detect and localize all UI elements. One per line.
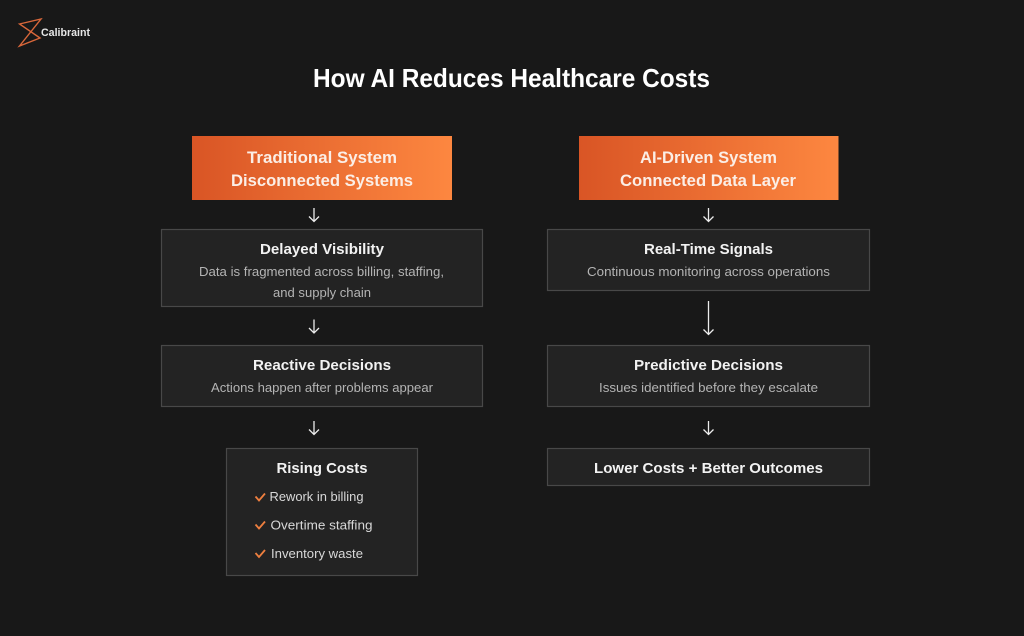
- card: Lower Costs + Better Outcomes: [548, 448, 870, 486]
- arrow: [704, 208, 714, 222]
- card: Real-Time Signals: Continuous monitoring across operations: [587, 265, 830, 279]
- arrow: [309, 421, 319, 434]
- panel: AI-driven system column: [548, 136, 870, 486]
- arrow: [704, 421, 714, 434]
- card: Reactive Decisions: Reactive Decisions: [253, 357, 391, 374]
- panel: traditional system column: [162, 136, 482, 576]
- card: Real-Time Signals: Real-Time Signals: [644, 241, 773, 258]
- header: Traditional System: Traditional System: [247, 149, 397, 167]
- card: Predictive Decisions: Predictive Decisions: [634, 357, 783, 374]
- logo: Calibraint: Calibraint: [41, 27, 90, 39]
- arrow: [309, 320, 319, 333]
- card: Delayed Visibility: Data is fragmented across billing, staffing,: [199, 265, 444, 279]
- card: Predictive Decisions: Issues identified before they escalate: [599, 381, 818, 395]
- card: Delayed Visibility: Delayed Visibility: [260, 241, 385, 258]
- logo: Calibraint: [20, 19, 90, 46]
- arrow: long: [704, 301, 714, 334]
- list item: Overtime staffing: Overtime staffing: [270, 518, 373, 532]
- list item: Rework in billing: Rework in billing: [270, 490, 364, 504]
- header: AI-Driven System: [579, 136, 838, 200]
- card: Rising Costs: Rising Costs: [276, 460, 368, 477]
- header: Traditional System: [192, 136, 452, 200]
- list item: Inventory waste: Inventory waste: [271, 547, 363, 561]
- header: Traditional System: Disconnected Systems: [231, 172, 413, 190]
- card: Reactive Decisions: Actions happen after problems appear: [211, 381, 433, 395]
- card: Delayed Visibility: and supply chain: [273, 286, 371, 300]
- header: AI-Driven System: AI-Driven System: [640, 149, 777, 167]
- card: Lower Costs + Better Outcomes: Lower Costs + Better Outcomes: [594, 460, 823, 477]
- card: Delayed Visibility: [162, 230, 482, 306]
- card: Predictive Decisions: [548, 346, 870, 406]
- card: Reactive Decisions: [162, 346, 482, 406]
- header: AI-Driven System: Connected Data Layer: [620, 172, 797, 190]
- card: Rising Costs: [226, 448, 418, 576]
- card: Real-Time Signals: [548, 230, 870, 290]
- title: How AI Reduces Healthcare Costs: [313, 63, 710, 93]
- arrow: [309, 208, 319, 222]
